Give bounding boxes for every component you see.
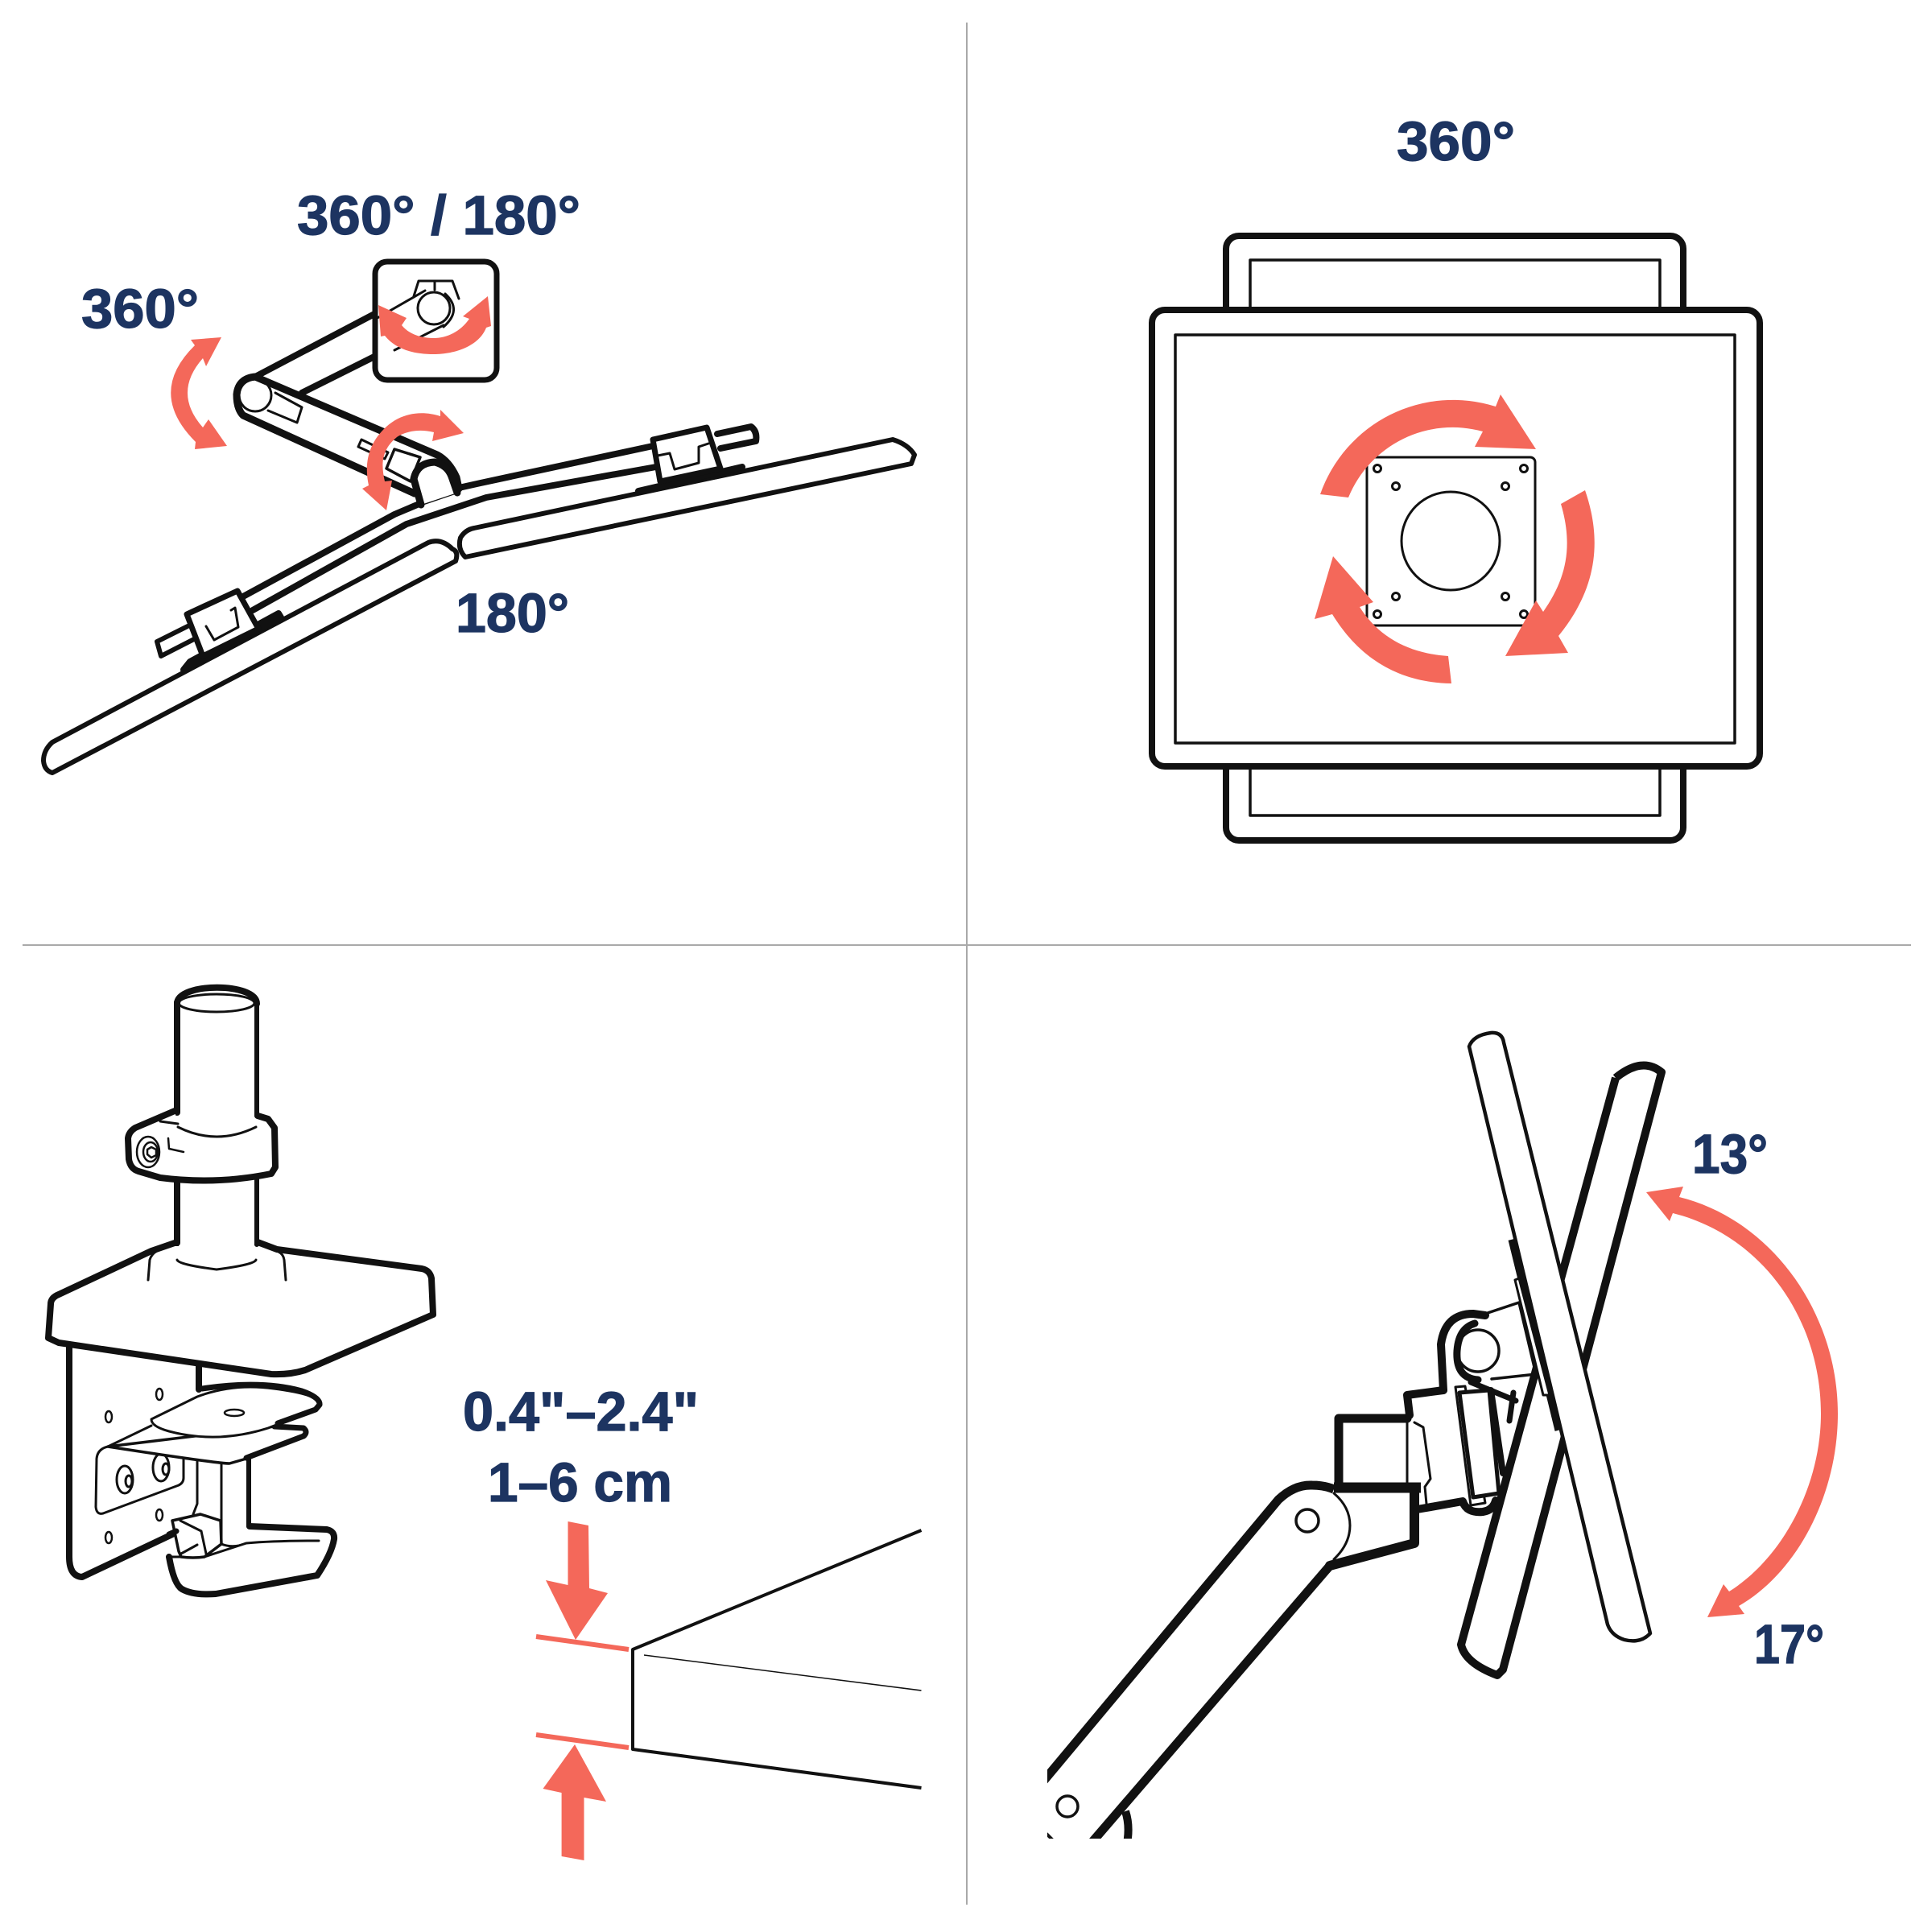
arrow: elbow rotation [171,337,227,449]
label: 360: 360° [81,278,199,340]
clamp screw and foot [169,1459,334,1594]
panel: monitor portrait-landscape rotation [1152,110,1760,840]
arrow: top clockwise [1320,394,1536,497]
front monitor in tilt [1469,1033,1650,1641]
clamp top plate [48,1242,433,1374]
arrow: thickness from above [546,1521,608,1640]
lower arm segment with knuckle [236,377,459,505]
thickness limit top line [536,1637,629,1649]
dual arm crossbar [157,427,756,656]
arrow: thickness from below [543,1744,606,1860]
arrow: tilt range [1646,1187,1838,1617]
VESA mounting plate [1367,457,1535,625]
mounting pole [177,988,257,1269]
panel: monitor tilt side view [1038,1033,1838,1848]
label: desk thickness centimetres: 1–6 cm [488,1451,672,1513]
clamp pressure disk [108,1385,320,1463]
right monitor clamp [638,427,742,491]
upper arm segment [255,313,376,393]
tilt bracket [1441,1302,1536,1473]
desk edge [633,1530,921,1788]
back monitor outline [1226,236,1683,840]
monitor mount square with pivot [375,262,497,380]
clamp bracket with slots [96,1426,184,1513]
lower arm [1038,1485,1414,1848]
monitor mounting plate [1511,1240,1558,1430]
right monitor top view [460,440,914,557]
thickness limit bottom line [536,1735,629,1748]
back monitor in tilt [1461,1065,1662,1675]
left monitor top view [43,541,456,773]
arm end blocks [1334,1390,1496,1512]
label: 17 degrees down: 17° [1754,1613,1824,1675]
label: 360: 360° [1397,110,1515,172]
panel: dual monitor top view rotation [43,184,914,773]
label: 360 / 180: 360° / 180° [297,184,580,246]
clamp back plate [69,1346,199,1577]
label: desk thickness inches: 0.4"–2.4" [463,1381,699,1443]
arrow: left clockwise [1315,556,1451,683]
pole collar with bolt [128,1111,275,1181]
arrow: pivot rotation [378,296,491,354]
hinge clip [1455,1386,1499,1505]
arrow: lower joint rotation [362,410,464,510]
left monitor clamp [184,591,281,670]
label: 13 degrees up: 13° [1692,1123,1768,1185]
panel: desk clamp [48,988,921,1860]
arrow: right clockwise [1505,490,1595,656]
label: 180: 180° [456,582,569,644]
front monitor outline [1152,310,1760,766]
